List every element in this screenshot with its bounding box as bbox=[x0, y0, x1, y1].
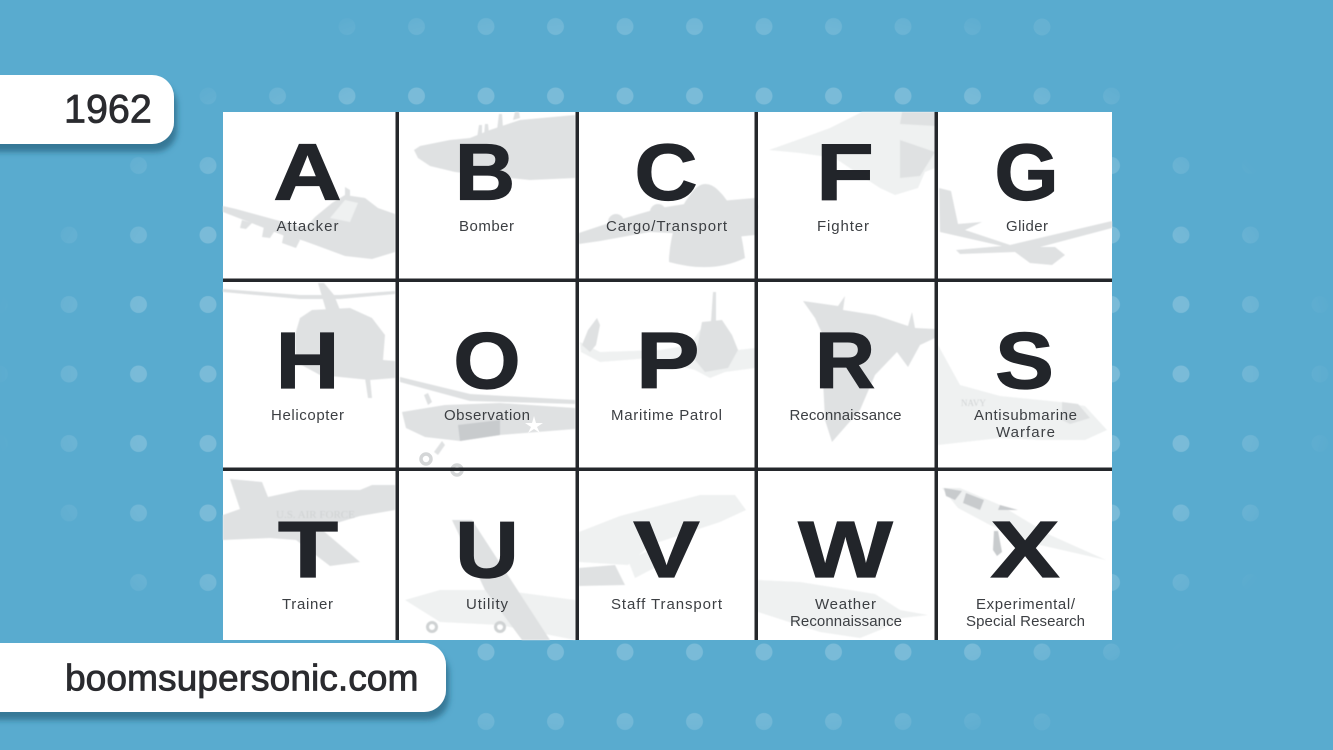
cell: V Staff Transport bbox=[579, 495, 746, 613]
label: Weather Reconnaissance: Weather bbox=[815, 596, 876, 613]
icon: helicopter bbox=[223, 283, 395, 398]
label: Fighter: Fighter bbox=[817, 218, 869, 235]
letter H: H bbox=[276, 316, 339, 405]
cell: A Attacker bbox=[223, 127, 395, 259]
letter A: A bbox=[273, 127, 341, 217]
letter R: R bbox=[815, 316, 875, 406]
label: Staff Transport: Staff Transport bbox=[611, 596, 723, 613]
label: Reconnaissance: Reconnaissance bbox=[790, 407, 902, 424]
icon: antisubmarine aircraft bbox=[938, 345, 1107, 445]
label: Antisubmarine Warfare: Warfare bbox=[996, 424, 1055, 441]
icon: weather reconnaissance aircraft bbox=[758, 580, 928, 638]
cell: G Glider bbox=[939, 128, 1112, 265]
letter X: X bbox=[991, 504, 1059, 594]
cell: R Reconnaissance bbox=[790, 296, 935, 442]
label: Observation: Observation bbox=[444, 407, 530, 424]
cell: T Trainer bbox=[223, 479, 395, 613]
icon: cargo aircraft bbox=[579, 184, 758, 267]
cell: O Observation bbox=[400, 316, 575, 475]
source badge: boomsupersonic.com bbox=[0, 643, 446, 712]
letter O: O bbox=[453, 316, 521, 405]
label: Bomber: Bomber bbox=[459, 218, 514, 235]
icon: trainer aircraft bbox=[223, 479, 395, 566]
icon: glider aircraft bbox=[939, 188, 1112, 265]
letter W: W bbox=[798, 505, 893, 595]
label: Attacker: Attacker bbox=[276, 218, 338, 235]
cell: S Antisubmarine Warfare bbox=[938, 316, 1107, 445]
label: Helicopter: Helicopter bbox=[271, 407, 344, 424]
year badge: 1962: 1962 bbox=[64, 88, 152, 132]
label: Glider: Glider bbox=[1006, 218, 1048, 235]
label: Utility: Utility bbox=[466, 596, 508, 613]
label: Experimental / Special Research bbox=[966, 596, 1085, 630]
letter G: G bbox=[994, 128, 1059, 217]
cell: C Cargo/Transport bbox=[579, 127, 758, 267]
letter T: T bbox=[278, 506, 338, 595]
label: Antisubmarine Warfare bbox=[974, 407, 1077, 441]
letter S: S bbox=[995, 316, 1054, 405]
cell: X Experimental bbox=[942, 488, 1106, 630]
source badge: boomsupersonic.com: boomsupersonic.com bbox=[65, 656, 418, 698]
star marking bbox=[525, 416, 543, 433]
label: Experimental / Special Research: Experimental/ bbox=[976, 596, 1076, 613]
cell: W Weather Reconnaissance bbox=[758, 505, 928, 638]
label: Antisubmarine Warfare: Antisubmarine bbox=[974, 407, 1077, 424]
letter F: F bbox=[816, 127, 874, 217]
wheels bbox=[421, 454, 462, 475]
icon: attacker aircraft bbox=[223, 187, 395, 259]
cell: H Helicopter bbox=[223, 283, 395, 424]
label: Maritime Patrol: Maritime Patrol bbox=[611, 407, 722, 424]
letter C: C bbox=[635, 127, 697, 217]
year badge: 1962 bbox=[0, 75, 174, 144]
icon: bomber aircraft bbox=[414, 112, 575, 180]
icon: utility aircraft bbox=[405, 520, 575, 640]
label: Weather Reconnaissance bbox=[790, 596, 902, 630]
cell: P Maritime Patrol bbox=[580, 292, 755, 424]
icon: antisubmarine aircraft: NAVY bbox=[961, 398, 986, 408]
letter V: V bbox=[633, 505, 700, 595]
cell: F Fighter bbox=[769, 112, 935, 235]
cell: B Bomber bbox=[414, 112, 575, 235]
label: Experimental / Special Research: Special Research bbox=[966, 613, 1085, 630]
cell: U Utility bbox=[405, 505, 575, 640]
icon: maritime patrol aircraft bbox=[580, 292, 755, 378]
letter U: U bbox=[455, 505, 519, 594]
icon: experimental aircraft bbox=[942, 488, 1106, 560]
icon: trainer aircraft: U.S. AIR FORCE bbox=[276, 509, 355, 521]
label: Cargo/Transport: Cargo/Transport bbox=[606, 218, 728, 235]
icon: staff transport aircraft bbox=[579, 495, 746, 586]
icon: observation aircraft bbox=[400, 377, 575, 455]
icon: fighter aircraft bbox=[769, 112, 935, 195]
letter B: B bbox=[455, 128, 515, 217]
icon: reconnaissance aircraft bbox=[803, 296, 935, 442]
label: Trainer: Trainer bbox=[282, 596, 333, 613]
letter P: P bbox=[636, 315, 699, 405]
label: Weather Reconnaissance: Reconnaissance bbox=[790, 613, 902, 630]
panel: letter grid bbox=[223, 112, 1112, 640]
